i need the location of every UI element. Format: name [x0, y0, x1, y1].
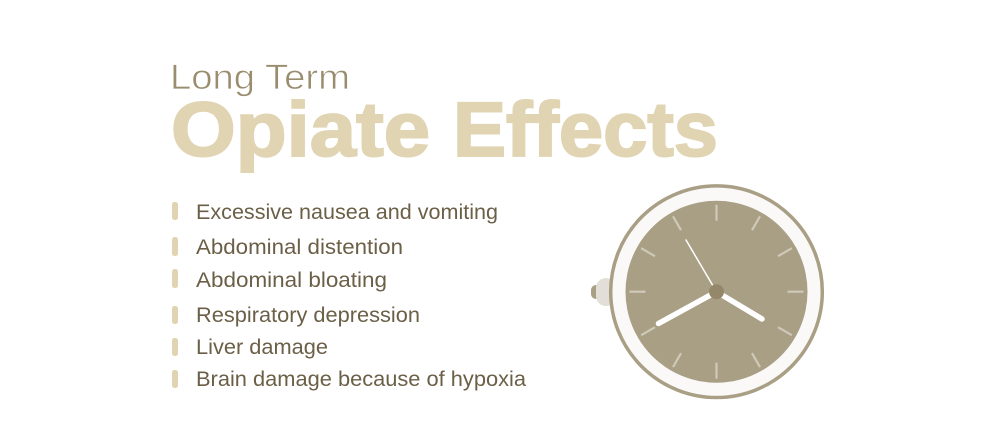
list item: respiratory: Respiratory depression — [196, 304, 420, 327]
clock hour hand — [716, 292, 762, 319]
list item: liver: Liver damage — [196, 336, 328, 359]
clock crown — [591, 278, 616, 306]
clock dial — [626, 201, 808, 383]
list item: bloating: Abdominal bloating — [196, 269, 387, 292]
list of effects — [172, 201, 526, 391]
title: Opiate Effects: Effects — [453, 87, 718, 173]
clock bezel — [611, 186, 822, 398]
icon: clock — [591, 186, 822, 398]
clock tick marks — [630, 205, 804, 379]
list item: distention: Abdominal distention — [196, 236, 403, 259]
list item: brain: Brain damage because of hypoxia — [196, 368, 526, 391]
title: Opiate Effects: Opiate — [171, 87, 430, 173]
list item: nausea: Excessive nausea and vomiting — [196, 201, 498, 224]
clock minute hand — [658, 292, 716, 324]
clock center hub — [709, 284, 724, 299]
title: Long Term: Long Term — [170, 58, 350, 97]
clock second hand — [686, 240, 716, 292]
